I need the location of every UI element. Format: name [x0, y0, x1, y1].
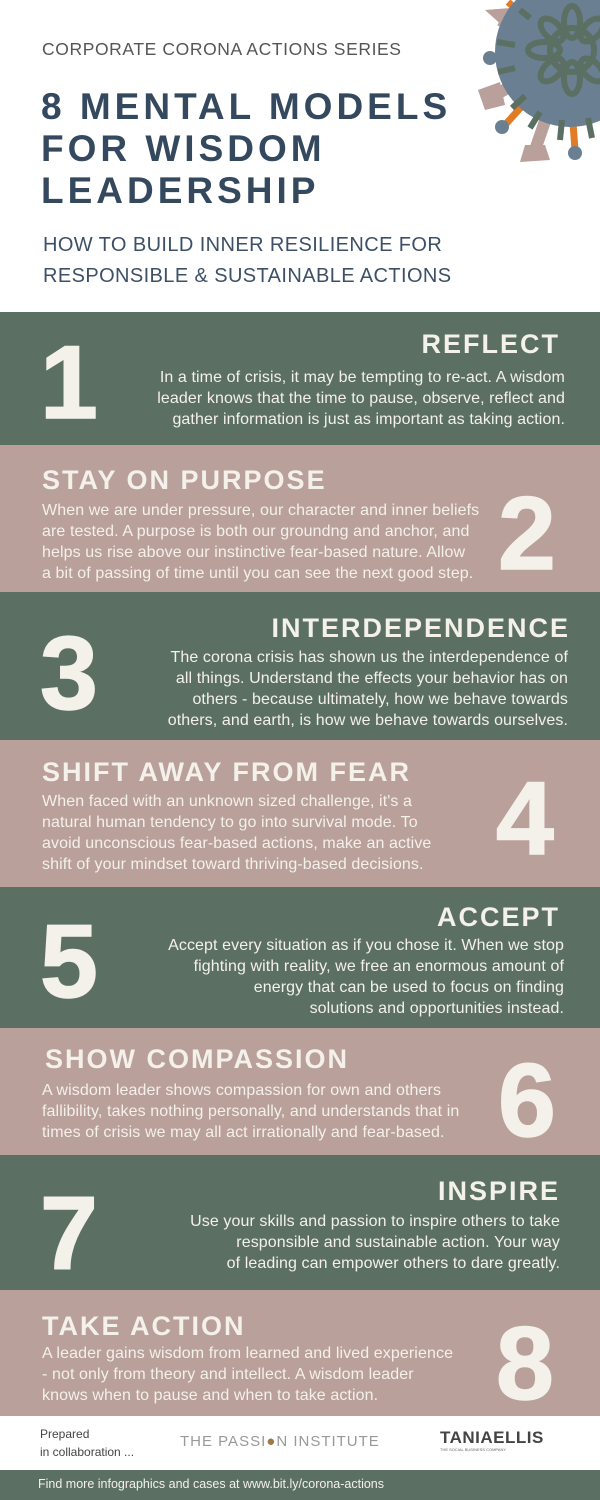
- title: FOR WISDOM: [41, 128, 326, 169]
- heading: SHOW COMPASSION: [45, 1044, 349, 1074]
- title: LEADERSHIP: [41, 170, 319, 211]
- number 6: 6: [498, 1043, 556, 1159]
- body text: energy that can be used to focus on finding: [254, 979, 564, 996]
- body text: all things. Understand the effects your behavior has on: [176, 670, 568, 687]
- title: [41, 86, 451, 211]
- heading: STAY ON PURPOSE: [42, 465, 327, 495]
- body text: times of crisis we may all act irrationally and fear-based.: [42, 1124, 444, 1141]
- body text: When we are under pressure, our character and inner beliefs: [42, 502, 479, 519]
- footer credits: [0, 1416, 600, 1470]
- body text: solutions and opportunities instead.: [310, 1000, 564, 1017]
- body text: others, and earth, is how we behave towards ourselves.: [168, 712, 568, 729]
- body text: A wisdom leader shows compassion for own and others: [42, 1082, 441, 1099]
- icon: virus: [478, 0, 600, 162]
- heading: INSPIRE: [438, 1176, 560, 1206]
- number 8: 8: [496, 1306, 554, 1422]
- footer bar: Find more infographics and cases at www.bit.ly/corona-actions: [38, 1477, 384, 1491]
- panel 8: take action: [0, 1290, 600, 1416]
- body text: [157, 369, 565, 428]
- heading: SHIFT AWAY FROM FEAR: [42, 757, 411, 787]
- footer bar: [0, 1470, 600, 1500]
- body text: [190, 1213, 560, 1272]
- body text: others - because ultimately, how we behave towards: [192, 691, 568, 708]
- body text: gather information is just as important as taking action.: [172, 411, 565, 428]
- prepared text: Prepared: [40, 1427, 89, 1441]
- number 7: 7: [40, 1176, 98, 1292]
- logo: passion institute: THE PASSI●N INSTITUTE: [180, 1433, 380, 1450]
- prepared text: [40, 1427, 134, 1459]
- prepared text: in collaboration ...: [40, 1445, 134, 1459]
- number 2: 2: [498, 476, 556, 592]
- heading: TAKE ACTION: [42, 1311, 246, 1341]
- body text: fallibility, takes nothing personally, and understands that in: [42, 1103, 459, 1120]
- subtitle: HOW TO BUILD INNER RESILIENCE FOR: [43, 234, 442, 256]
- body text: Accept every situation as if you chose it. When we stop: [168, 937, 564, 954]
- panel 4: shift away from fear: [0, 740, 600, 887]
- body text: leader knows that the time to pause, observe, reflect and: [157, 390, 565, 407]
- body text: Use your skills and passion to inspire others to take: [190, 1213, 560, 1230]
- panel 2: stay on purpose: [0, 445, 600, 592]
- body text: are tested. A purpose is both our groundng and anchor, and: [42, 523, 469, 540]
- body text: A leader gains wisdom from learned and lived experience: [42, 1345, 453, 1362]
- body text: [42, 502, 479, 582]
- panel 7: inspire: [0, 1155, 600, 1290]
- body text: responsible and sustainable action. Your way: [236, 1234, 560, 1251]
- body text: a bit of passing of time until you can see the next good step.: [42, 565, 473, 582]
- logo: tania ellis: TANIAELLIS: [440, 1428, 544, 1447]
- title: 8 MENTAL MODELS: [41, 86, 451, 127]
- body text: [42, 793, 431, 873]
- body text: When faced with an unknown sized challenge, it's a: [42, 793, 412, 810]
- body text: shift of your mindset toward thriving-based decisions.: [42, 856, 424, 873]
- body text: [168, 649, 568, 729]
- body text: - not only from theory and intellect. A wisdom leader: [42, 1366, 414, 1383]
- logo: tania ellis: THE SOCIAL BUSINESS COMPANY: [440, 1447, 506, 1452]
- heading: ACCEPT: [437, 902, 560, 932]
- body text: fighting with reality, we free an enormous amount of: [194, 958, 564, 975]
- body text: knows when to pause and when to take action.: [42, 1387, 378, 1404]
- heading: INTERDEPENDENCE: [271, 613, 570, 643]
- number 5: 5: [40, 904, 98, 1020]
- panel 3: interdependence: [0, 592, 600, 740]
- body text: helps us rise above our instinctive fear-based nature. Allow: [42, 544, 465, 561]
- body text: [42, 1345, 453, 1404]
- panel 5: accept: [0, 887, 600, 1028]
- body text: of leading can empower others to dare greatly.: [227, 1255, 560, 1272]
- panel 6: show compassion: [0, 1028, 600, 1155]
- subtitle: RESPONSIBLE & SUSTAINABLE ACTIONS: [43, 265, 452, 287]
- number 1: 1: [40, 325, 98, 441]
- number 3: 3: [40, 616, 98, 732]
- body text: [168, 937, 564, 1017]
- body text: In a time of crisis, it may be tempting to re-act. A wisdom: [160, 369, 565, 386]
- series label: CORPORATE CORONA ACTIONS SERIES: [42, 39, 402, 59]
- heading: REFLECT: [422, 329, 560, 359]
- body text: avoid unconscious fear-based actions, make an active: [42, 835, 431, 852]
- body text: [42, 1082, 459, 1141]
- body text: The corona crisis has shown us the interdependence of: [170, 649, 568, 666]
- number 4: 4: [496, 761, 554, 877]
- subtitle: [43, 234, 452, 287]
- body text: natural human tendency to go into survival mode. To: [42, 814, 418, 831]
- panel 1: reflect: [0, 312, 600, 445]
